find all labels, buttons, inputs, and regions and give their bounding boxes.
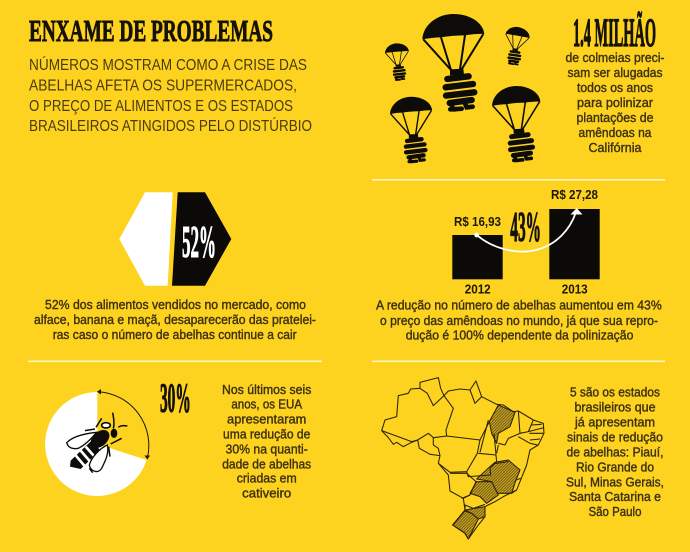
- subtitle text block: O PREÇO DE ALIMENTOS E OS ESTADOS: [29, 98, 293, 115]
- text: EUA: apresentaram: [227, 412, 306, 426]
- text: 30%: [160, 375, 191, 421]
- chart: 52% hexagon: 52%: [182, 217, 216, 267]
- text: EUA: cativeiro: [242, 487, 291, 501]
- text: estados: 5 são os estados: [570, 386, 660, 400]
- text: EUA: criadas em: [237, 471, 297, 485]
- bar chart: almond price: R$ 16,93: [454, 214, 501, 229]
- text: amêndoas: o preço das amêndoas no mundo, já que sua repro-: [380, 314, 658, 328]
- bar chart: almond price: R$ 27,28: [551, 187, 598, 202]
- text: estados: Sul, Minas Gerais,: [566, 476, 664, 490]
- text: EUA: [222, 383, 311, 501]
- text: colmeias: amêndoas na: [578, 126, 652, 140]
- subtitle text block: ABELHAS AFETA OS SUPERMERCADOS,: [29, 78, 297, 94]
- text: colmeias: para polinizar: [577, 96, 653, 110]
- text: 52% dos alimentos: alface, banana e maçã, desaparecerão das pratelei-: [34, 313, 316, 327]
- map: Brazil states: [382, 378, 544, 539]
- text: colmeias: de colmeias preci-: [566, 51, 664, 65]
- text: EUA: uma redução de: [223, 427, 310, 441]
- text: 52% dos alimentos: [34, 298, 316, 342]
- text: EUA: 30% na quanti-: [226, 442, 308, 456]
- bar chart: almond price: 2013: [562, 281, 588, 296]
- text: colmeias: [566, 51, 664, 155]
- text: estados: Santa Catarina e: [569, 490, 661, 504]
- bar chart: almond price: [452, 187, 600, 296]
- subtitle text block: NÚMEROS MOSTRAM COMO A CRISE DAS: [29, 57, 307, 74]
- text: EUA: dade de abelhas: [222, 457, 311, 471]
- text: amêndoas: [376, 298, 662, 342]
- text: colmeias: Califórnia: [588, 141, 642, 155]
- icon: bee: [67, 413, 127, 473]
- bar chart: almond price: 43%: [510, 205, 541, 251]
- text: estados: [566, 386, 664, 519]
- text: estados: brasileiros que: [574, 401, 656, 415]
- text: colmeias: plantações de: [576, 111, 654, 125]
- text: EUA: Nos últimos seis: [222, 383, 311, 397]
- bar chart: almond price: 2012: [465, 281, 491, 296]
- text: estados: Rio Grande do: [576, 461, 654, 475]
- chart: 52% hexagon: [119, 192, 231, 286]
- text: colmeias: todos os anos: [577, 81, 653, 95]
- text: 52% dos alimentos: ras caso o número de abelhas continue a cair: [53, 328, 297, 342]
- subtitle text block: [29, 57, 312, 135]
- subtitle text block: BRASILEIROS ATINGIDOS PELO DISTÚRBIO: [29, 118, 312, 135]
- text: amêndoas: A redução no número de abelhas aumentou em 43%: [376, 298, 662, 312]
- title: ENXAME DE PROBLEMAS: [29, 13, 273, 48]
- text: amêndoas: dução é 100% dependente da polinização: [406, 328, 633, 342]
- text: estados: já apresentam: [574, 416, 655, 430]
- text: estados: de abelhas: Piauí,: [566, 446, 664, 460]
- icon: parachuting beehives: [385, 14, 540, 162]
- text: EUA: anos, os EUA: [231, 397, 303, 411]
- text: 52% dos alimentos: 52% dos alimentos vendidos no mercado, como: [45, 298, 306, 312]
- text: estados: São Paulo: [588, 505, 642, 519]
- text: colmeias: sam ser alugadas: [568, 66, 662, 80]
- chart: 30% pie with bee: [45, 389, 150, 496]
- text: estados: sinais de redução: [567, 431, 663, 445]
